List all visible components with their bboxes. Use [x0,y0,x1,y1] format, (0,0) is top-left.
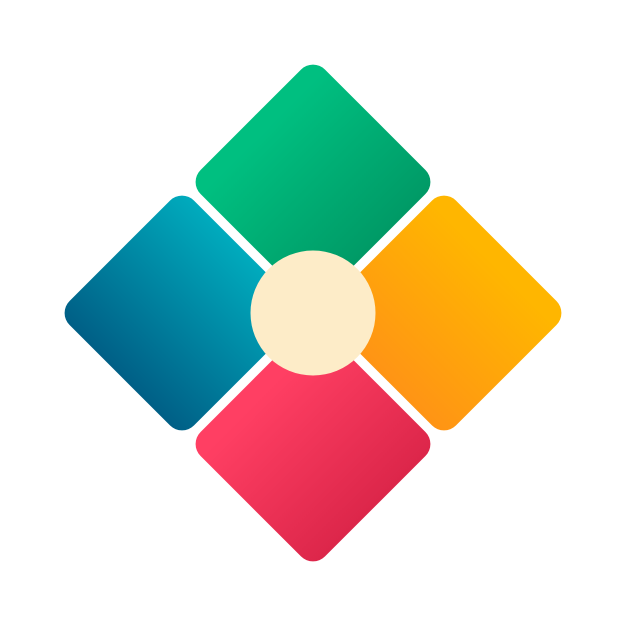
panel: top green diamond [189,58,437,306]
center circle [250,250,376,376]
panel: left blue diamond [58,189,306,437]
panel: right orange diamond [320,189,568,437]
panel: bottom red diamond [189,320,437,568]
